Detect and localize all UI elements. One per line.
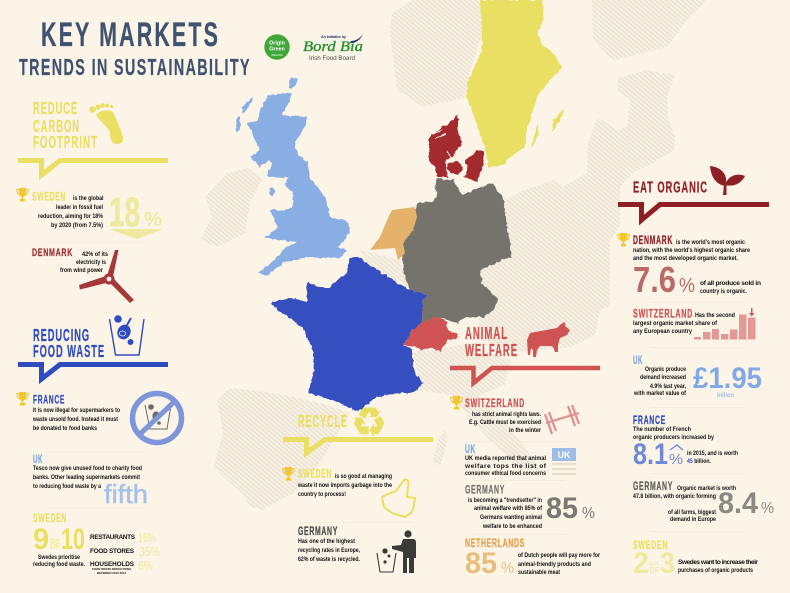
icon: sprout [710,166,745,195]
map: United Kingdom [236,77,350,275]
text: Sweden carbon: SWEDEN [32,192,66,204]
text: Denmark wind: DENMARK [32,247,73,259]
logo: Bord Bia: An initiative by [321,35,346,39]
icon: trophy [283,467,294,480]
list: food waste reductions: FOOD STORES [90,548,135,555]
text: Germany organic: GERMANY [633,481,673,493]
stat: 2 out of 3: 3 [660,547,675,580]
text: Switzerland: E.g. Cattle must be exercised [469,419,541,426]
text: Sweden food: SWEDEN [33,513,67,525]
text: Germany recycle: Has one of the highest [298,538,356,545]
list: food waste reductions [90,530,160,575]
callout bar [618,204,769,220]
map: Denmark [428,115,484,182]
map: hatched neighbouring land [200,0,707,510]
text: Switzerland: SWITZERLAND [465,398,525,410]
text: France organic: FRANCE [633,415,666,427]
title: TRENDS IN SUSTAINABILITY [19,54,251,80]
text: Germany recycle: GERMANY [298,526,338,538]
icon: no food waste [132,394,182,442]
stat: 85% Germany: % [582,505,595,522]
text: Germany recycle: recycling rates in Europe, [298,547,360,554]
text: Switzerland: in the winter [509,427,541,434]
text: France: be donated to food banks [33,425,97,432]
list: food waste reductions: 16% [138,530,156,545]
text: Sweden recycle [297,468,392,498]
stat: 9 out of 10: OF [50,542,60,551]
text: Switzerland organic: SWITZERLAND [633,308,693,320]
text: UK: banks. Other leading supermarkets commit [33,474,141,481]
text: Germany welfare: Germans wanting animal [480,514,542,521]
stat: 18%: 18 [109,189,140,235]
text: Germany welfare: is becoming a "trendsetter" in [468,497,542,504]
text: France organic: 45 billion. [687,458,711,465]
text: Denmark wind: from wind power [60,267,103,274]
text: Germany welfare: GERMANY [465,484,505,496]
text: Sweden carbon [32,192,104,229]
text: Germany welfare: welfare to be enhanced [482,523,542,530]
icon: dumbbell [545,405,579,434]
stat: £1.95 billion: £1.95 [693,362,762,395]
stat: 85% Netherlands [465,547,514,580]
heading: reducing food waste [33,325,105,361]
callout bar [18,364,168,379]
text: Sweden carbon: by 2020 (from 7.5%) [51,222,103,229]
stat: 85% Netherlands: % [501,560,514,577]
text: France organic [633,415,738,465]
callout bar [18,160,168,175]
heading: eat organic: EAT ORGANIC [633,180,708,196]
title [19,16,251,80]
stat: 9 out of 10: OUT [50,539,60,545]
text: Netherlands: of Dutch people will pay more for [518,552,600,559]
callout bar [283,440,433,453]
heading: recycle: RECYCLE [298,411,348,431]
text: UK organic: with market value of [633,390,687,397]
stat: 8.1%: % [669,451,683,468]
logo: Origin Green: IRELAND [271,53,283,57]
text: Switzerland organic: any European country [633,328,692,335]
stat: 2 out of 3: OF [649,566,659,575]
stat: 18%: % [144,209,162,231]
panel: reducing food waste [17,315,181,575]
stat: 8.1%: 8.1 [633,438,668,471]
icon: person recycling [377,530,416,573]
text: France [32,394,120,432]
stat: 85% Netherlands: 85 [465,547,497,580]
stat: 7.6%: % [679,275,695,297]
icon: recycle: ♻ [351,400,387,446]
text: Netherlands: sustainable meat [518,569,561,576]
stat: £1.95 billion: billion [717,393,734,399]
text: Sweden organic: purchases of organic products [678,567,753,574]
stat: 8.4%: % [761,500,774,517]
text: produce share [700,280,761,295]
list: food waste reductions: RESTAURANTS [90,534,136,541]
stat: 85% Germany: 85 [546,492,578,525]
list: food waste reductions: FOOD WASTE REDUCTIONS [92,567,131,571]
text: France: It is now illegal for supermarkers to [33,407,120,414]
heading: reduce carbon footprint: REDUCE [33,98,78,118]
text: Switzerland: has strict animal rights laws. [472,411,541,418]
text: UK: UK media reported that animal [465,455,546,462]
text: produce share: of all produce sold in [700,280,761,287]
text: Sweden food: reducing food waste. [33,561,85,568]
text: Denmark wind [32,247,108,274]
map: Netherlands [370,207,417,260]
text: Netherlands [465,538,600,576]
text: UK: to reducing food waste by a [33,483,101,490]
text: France organic: organic producers increased by [633,434,714,441]
heading: reduce carbon footprint: FOOTPRINT [33,132,98,152]
stat: 9 out of 10 [33,523,85,556]
logo: Origin Green [264,34,290,60]
text: Sweden recycle: SWEDEN [298,468,332,480]
callout bar [450,368,600,383]
text: UK: UK [465,444,476,456]
icon: trophy [451,396,462,410]
text: Switzerland organic: Has the second [695,312,735,319]
text: UK: consumer ethical food concerns [465,470,546,477]
text: Switzerland organic [633,308,735,335]
logo: Origin Green: Origin [269,40,285,46]
text: France organic: in 2015, and is worth [687,450,738,457]
text: Germany welfare: animal welfare with 85% of [474,505,543,512]
panel: eat organic [618,166,774,580]
stat: 8.4%: 8.4 [718,487,758,520]
text: Sweden carbon: leader in fossil fuel [56,204,103,211]
text: Denmark organic: and the most developed organic market. [633,255,738,262]
text: Denmark organic: is the world's most organic [676,239,745,246]
text: Sweden organic [633,540,758,574]
text: Germany organic: Organic market is worth [677,485,736,492]
icon: bin with food [110,315,144,355]
text: UK [464,444,547,477]
text: Sweden carbon: is the global [73,195,104,202]
text: UK organic: demand increased [640,374,686,381]
text: France: FRANCE [33,394,65,406]
text: UK: UK [33,454,43,466]
text: produce share: country is organic. [700,288,747,295]
stat: fifth: fifth [104,479,148,509]
text: Sweden carbon: reduction, aiming for 18% [38,213,103,220]
icon: wind turbine [79,250,134,303]
icon: trophy [17,188,28,202]
text: Germany organic: demand in Europe [670,516,716,523]
text: France: waste unsold food. Instead it must [32,416,119,423]
heading: reduce carbon footprint: CARBON [33,116,80,136]
text: Germany organic: 47.8 billion, with organic forming [633,493,716,500]
text: UK organic [633,355,687,397]
icon: footprint [89,103,123,144]
text: Germany welfare [465,484,543,530]
logo: Bord Bia: Irish Food Board [309,55,355,62]
text: Denmark wind: electricity is [76,259,106,266]
text: Sweden organic: SWEDEN [633,540,668,552]
text: UK: welfare tops the list of [464,463,547,470]
panel: reduce carbon footprint [17,98,168,303]
map: Germany [403,178,512,323]
heading: animal welfare: ANIMAL [465,323,508,343]
heading: reduce carbon footprint [33,98,98,152]
map: Sweden [467,0,565,167]
heading: animal welfare [465,323,518,360]
icon: UK newspaper [552,448,576,475]
stat: 2 out of 3: 2 [633,547,649,580]
text: Denmark organic: DENMARK [633,235,673,247]
panel: animal welfare [450,322,600,580]
text: Sweden food: Swedes prioritise [38,554,80,561]
text: Netherlands: NETHERLANDS [465,538,525,550]
panel: recycle [283,400,433,573]
text: Denmark wind: 42% of its [82,251,108,258]
list: food waste reductions: 6% [138,558,153,573]
heading: reducing food waste: REDUCING [33,325,90,345]
text: UK organic: UK [633,355,643,367]
list: food waste reductions: 35% [139,544,160,559]
logo: Bord Bia [303,34,363,62]
list: food waste reductions: HOUSEHOLDS [90,561,135,568]
list: food waste reductions: BETWEEN 2012-2014 [97,571,126,575]
title: KEY MARKETS [41,16,220,54]
text: Germany recycle: 62% of waste is recycled. [298,556,360,563]
text: France organic: The number of French [633,426,691,433]
text: Switzerland [465,398,541,434]
stat: 2 out of 3: OUT [649,562,659,568]
text: Switzerland organic: largest organic market share of [633,320,718,327]
text: Sweden recycle: is so good at managing [335,473,392,480]
map: Switzerland [403,317,457,352]
icon: UK newspaper: UK [558,450,571,460]
icon: trophy [17,392,28,406]
heading: reducing food waste: FOOD WASTE [33,341,105,361]
text: Germany recycle [298,526,360,563]
text: UK organic: 4.9% last year, [650,383,686,390]
map: France [270,257,428,412]
text: Denmark organic: nation, with the world's highest organic share [633,247,750,254]
heading: animal welfare: WELFARE [465,340,518,360]
text: Netherlands: animal-friendly products and [518,561,591,568]
text: Sweden recycle: country to process! [298,491,346,498]
text: UK [33,454,142,490]
text: Germany organic [633,481,736,523]
text: Germany organic: of all farms, biggest [668,509,717,516]
text: Sweden recycle: waste it now imports garbage into the [297,482,392,489]
stat: 9 out of 10: 10 [61,523,85,556]
text: Sweden organic: Swedes want to increase their [678,559,758,566]
stat: 7.6%: 7.6 [633,259,676,300]
icon: thumbs up [382,480,415,517]
logo: Origin Green: Green [269,46,285,52]
text: UK: Tesco now give unused food to charity food [33,465,142,472]
text: Denmark organic [633,235,750,262]
logo: Bord Bia: Bord Bia [303,39,363,55]
stat: 2 out of 3 [633,547,675,580]
icon: trophy [618,233,629,246]
stat: 85% Germany [546,492,595,525]
stat: 9 out of 10: 9 [33,523,49,556]
text: Sweden food [33,513,85,568]
chart: organic market share bars [694,308,756,340]
icon: cow [527,322,570,357]
text: UK organic: Organic produce [645,366,686,373]
